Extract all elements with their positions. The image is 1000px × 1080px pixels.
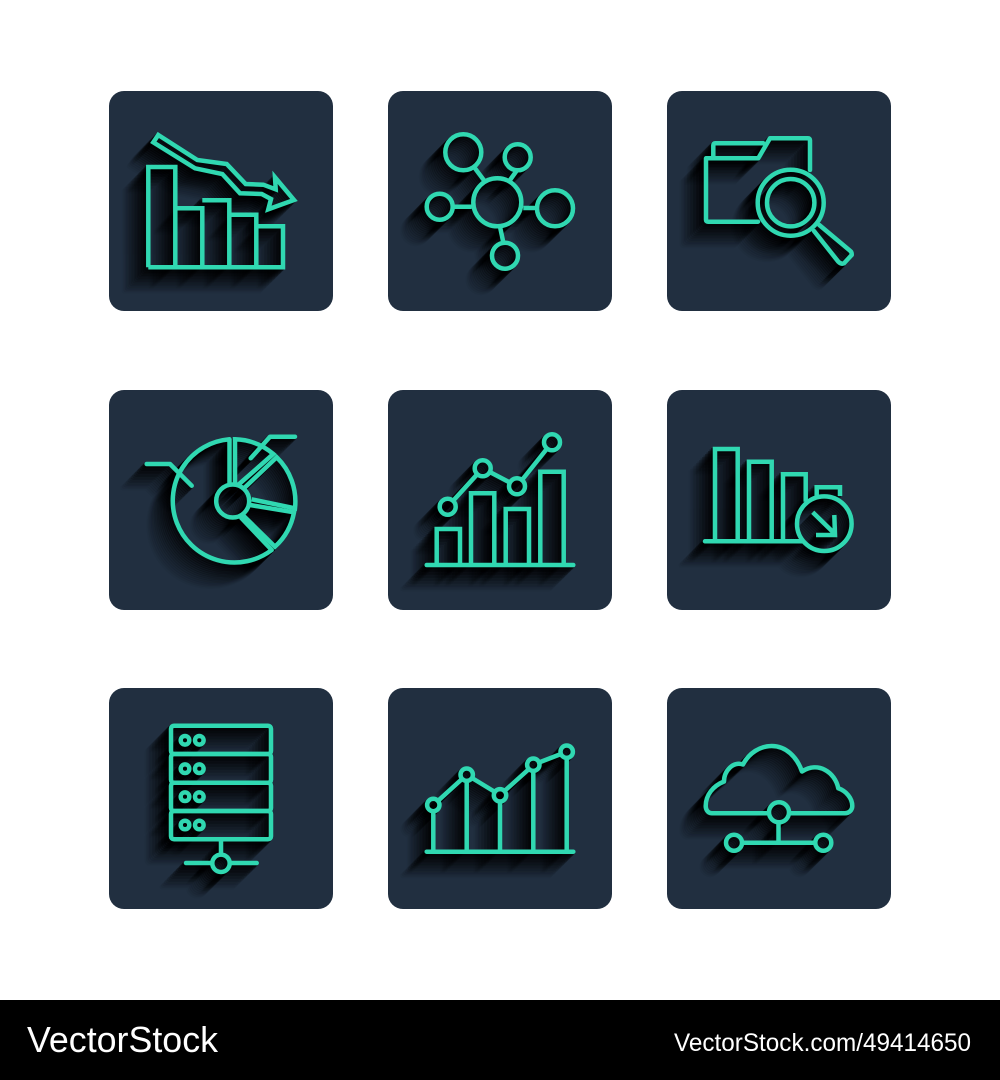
footer image id text: VectorStock.com/49414650 [674, 1029, 971, 1057]
panel: falling bar chart [109, 91, 333, 311]
icon: falling bars with arrow [148, 135, 294, 267]
icon: connected circles [427, 134, 573, 269]
icon: bars and line graph [427, 434, 573, 565]
icon: bars and stopwatch [705, 449, 852, 551]
icon: area line chart [427, 746, 573, 852]
panel: cloud network [667, 688, 891, 909]
panel: falling bars with timer [667, 390, 891, 610]
panel: server rack [109, 688, 333, 909]
footer logo text: VectorStock [27, 1019, 219, 1060]
panel: pie chart [109, 390, 333, 610]
panel: rising bars with line [388, 390, 612, 610]
icon: segmented pie with callouts [147, 437, 295, 562]
icon: cloud with connected nodes [706, 746, 852, 851]
panel: network hub [388, 91, 612, 311]
panel: folder search [667, 91, 891, 311]
footer bar [0, 1000, 1000, 1080]
icon: folder with magnifier [706, 138, 852, 264]
icon: server with network node [171, 726, 271, 872]
panel: line graph with stems [388, 688, 612, 909]
